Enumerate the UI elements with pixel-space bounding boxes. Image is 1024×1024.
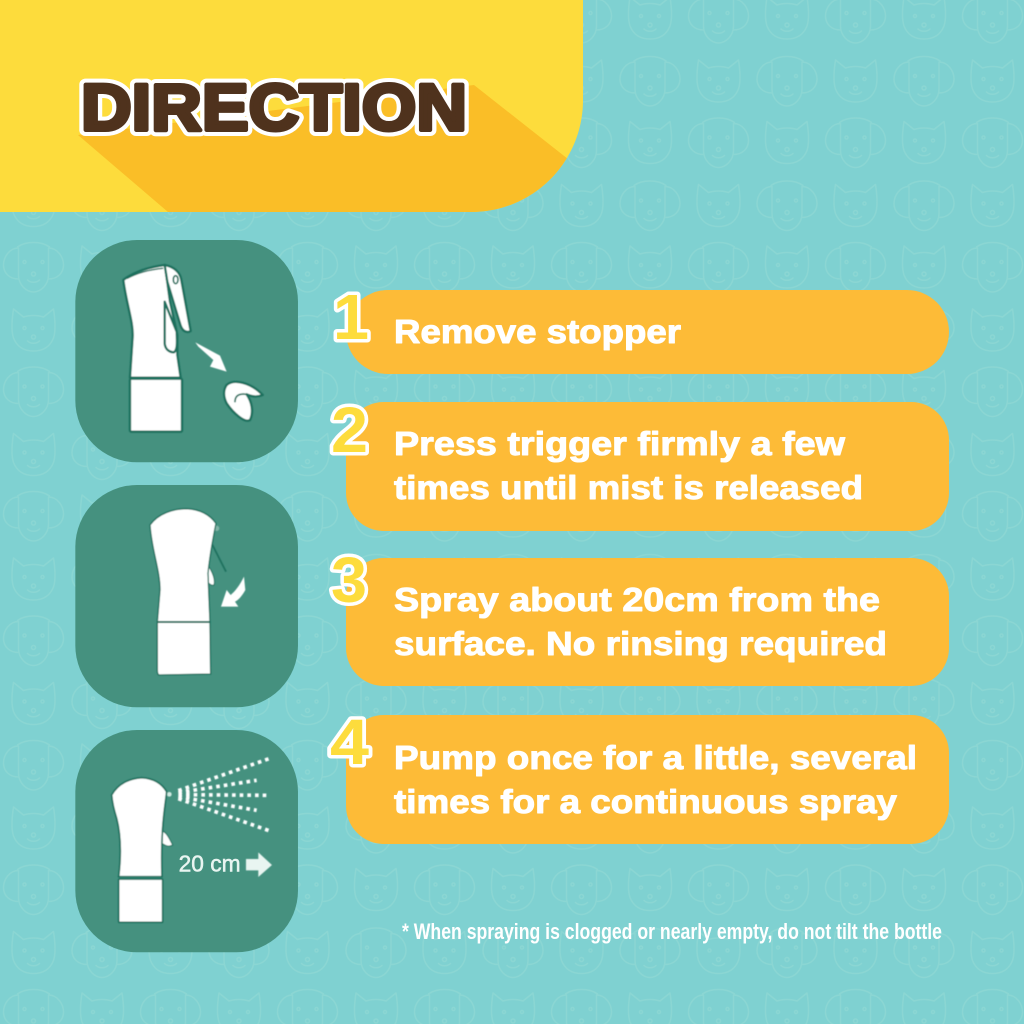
title: DIRECTION — [81, 70, 467, 144]
icon: bottle — [112, 778, 173, 922]
step 3 card — [346, 558, 949, 686]
header panel: yellow corner with title — [0, 0, 620, 212]
step 2 card — [346, 402, 949, 531]
step text — [394, 581, 887, 662]
step 4 card — [346, 715, 949, 844]
step text — [394, 739, 917, 820]
arrow — [246, 852, 272, 877]
step 2 number: 2 — [331, 394, 368, 466]
panel: step 1 icon, bottle and stopper — [75, 240, 298, 462]
label: 20 cm: 20 cm — [179, 850, 241, 876]
step 3 number: 3 — [331, 544, 367, 616]
step 4 number: 4 — [330, 706, 369, 778]
step text: surface. No rinsing required — [394, 625, 887, 662]
icon: bottle — [150, 509, 226, 675]
arrow — [221, 577, 245, 607]
panel: step 2 icon, press trigger — [75, 485, 298, 707]
step text: Press trigger firmly a few — [394, 425, 845, 462]
icon: bottle with stopper on — [123, 265, 191, 432]
step text — [394, 425, 863, 506]
spray mist — [178, 758, 270, 831]
step text: Spray about 20cm from the — [394, 581, 880, 618]
step text: Pump once for a little, several — [394, 739, 917, 776]
step text: Remove stopper — [394, 313, 681, 350]
step text: times until mist is released — [394, 469, 863, 506]
panel: step 3 icon, spray at 20 cm — [75, 730, 298, 952]
title: DIRECTION — [81, 70, 467, 144]
arrow — [195, 342, 227, 372]
step 1 number: 1 — [333, 281, 369, 353]
step text: times for a continuous spray — [394, 783, 898, 820]
step 1 card — [346, 290, 949, 374]
icon: removed stopper — [224, 382, 263, 421]
